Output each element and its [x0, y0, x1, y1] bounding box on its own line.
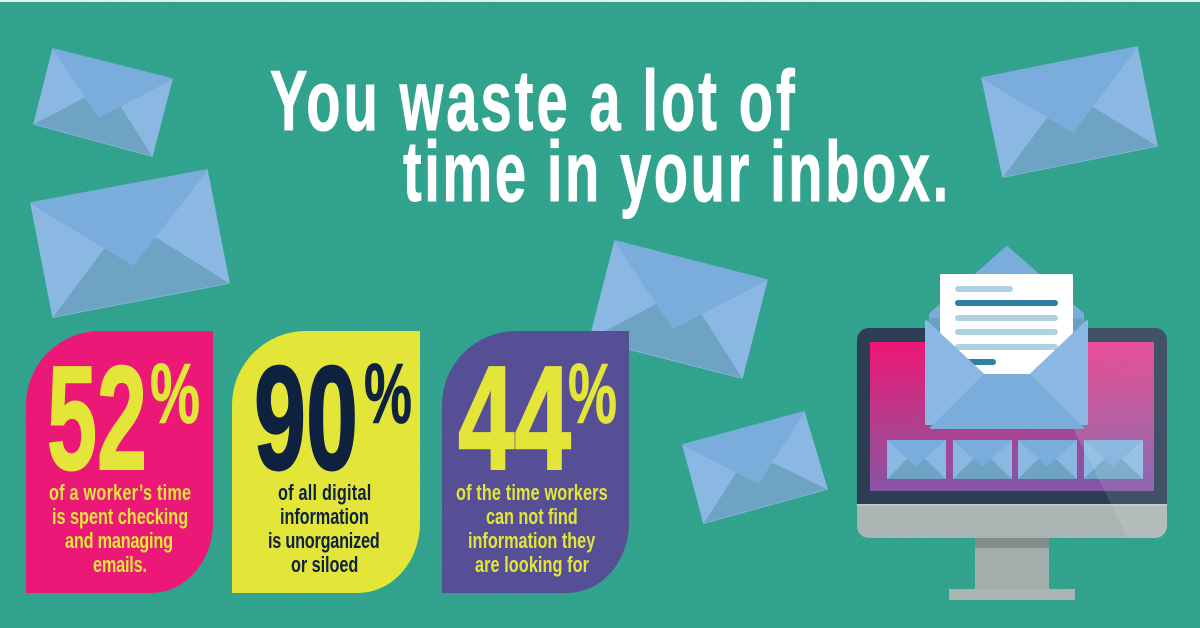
caption: 44%: are looking for [475, 553, 589, 578]
title: time in your inbox. [403, 125, 948, 220]
big number 52 percent: 52 [47, 336, 147, 501]
icon: desktop monitor with open email [857, 247, 1167, 600]
caption: 52%: emails. [93, 553, 147, 578]
caption: 52%: of a worker’s time [49, 481, 191, 506]
icon: envelope top right [982, 47, 1157, 177]
caption: 52% [49, 481, 191, 578]
monitor stand [949, 538, 1075, 600]
big number 90 percent: % [364, 347, 412, 442]
caption: 44%: can not find [486, 505, 578, 530]
caption: 90%: information [280, 505, 369, 530]
caption: 90% [268, 481, 380, 578]
icon: envelope lower centre [683, 412, 827, 523]
monitor body [857, 328, 1167, 538]
big number 90 percent: 90 [254, 336, 358, 501]
icon: envelope left large [31, 170, 229, 317]
screen gloss [1023, 328, 1167, 538]
panel: 52% statistic [26, 331, 213, 593]
inbox email tiles [887, 440, 1143, 479]
caption: 90%: or siloed [291, 553, 358, 578]
monitor screen [870, 342, 1154, 491]
panel: 90% statistic [232, 331, 420, 593]
icon: envelope top left small [34, 49, 172, 156]
title [270, 54, 948, 220]
title: You waste a lot of [270, 54, 795, 149]
open envelope with letter [926, 247, 1087, 428]
big number 44 percent: 44 [458, 336, 571, 501]
letter [940, 274, 1073, 384]
big number 44 percent: % [568, 347, 617, 442]
caption: 90%: of all digital [278, 481, 371, 506]
big number 52 percent: % [150, 347, 200, 442]
caption: 52%: and managing [65, 529, 173, 554]
caption: 44%: information they [468, 529, 595, 554]
caption: 90%: is unorganized [268, 529, 380, 554]
caption: 44%: of the time workers [456, 481, 608, 506]
caption: 52%: is spent checking [52, 505, 188, 530]
panel: 44% statistic [442, 331, 629, 593]
caption: 44% [456, 481, 608, 578]
icon: envelope centre [590, 241, 767, 378]
